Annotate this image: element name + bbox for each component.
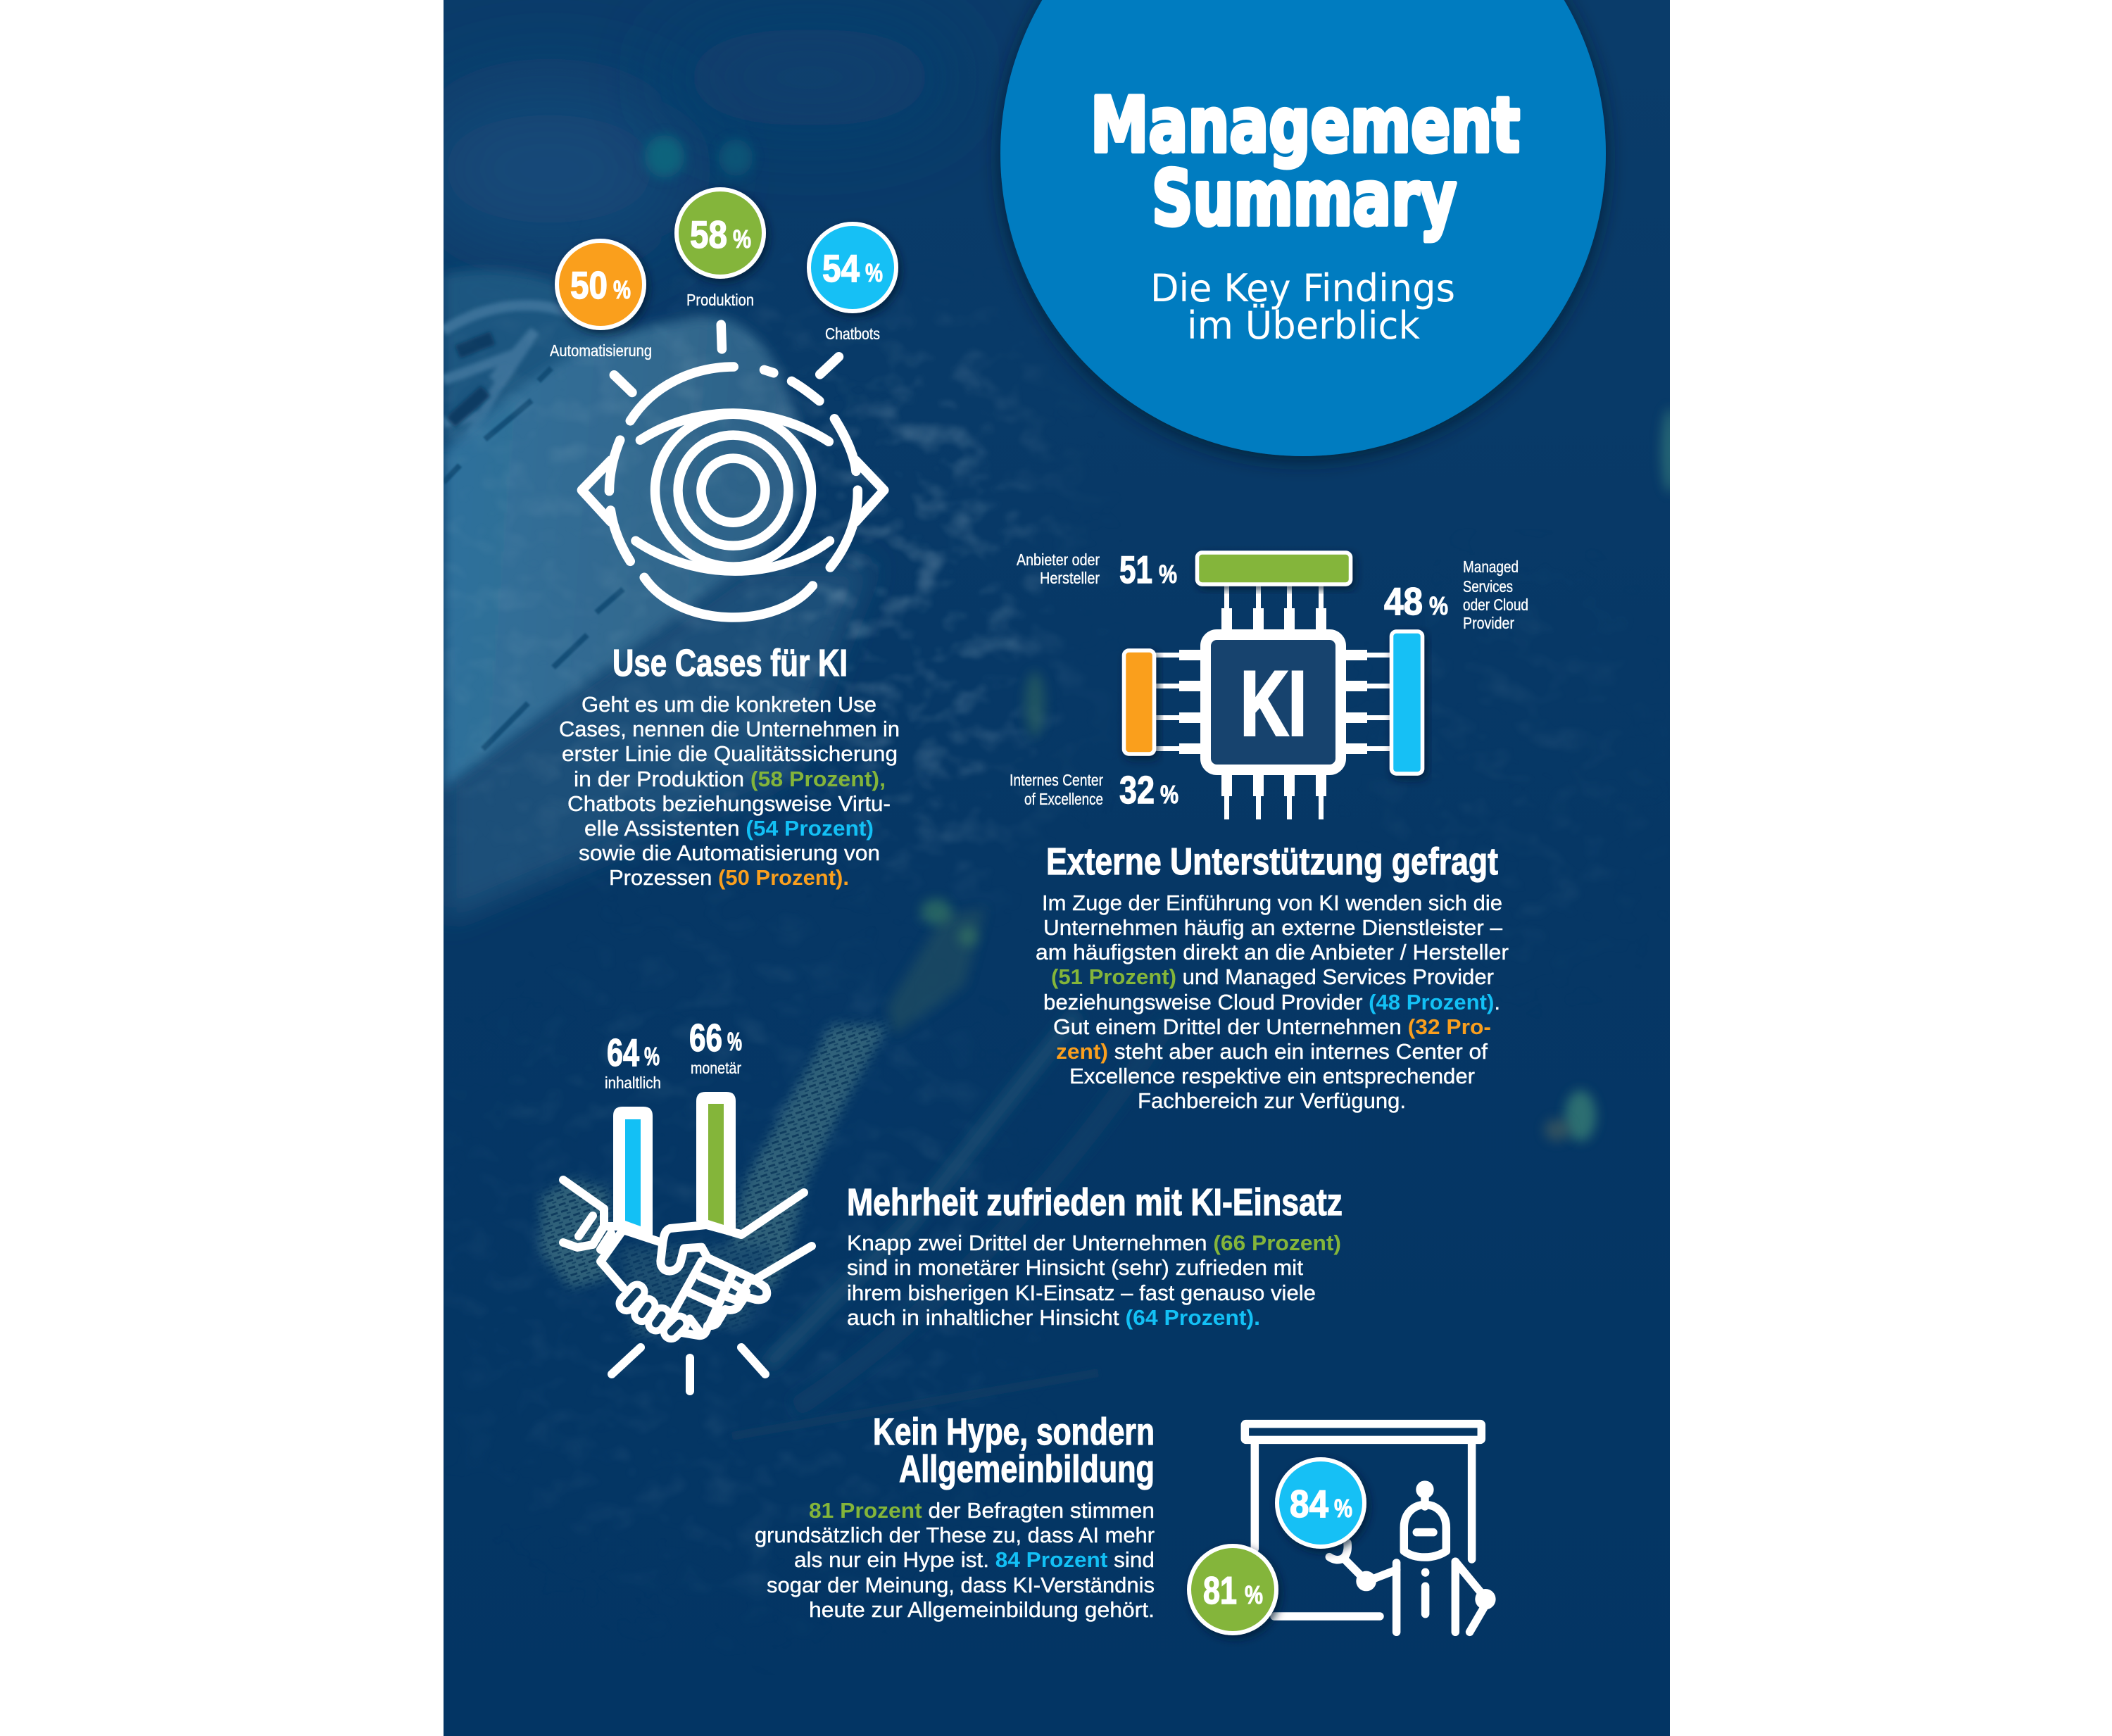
stat: 51 percent: 51 xyxy=(1119,548,1152,591)
text block: Unternehmen häufig an externe Dienstleister – xyxy=(1043,916,1502,940)
bubble: 50 percent Automatisierung: % xyxy=(613,275,631,304)
bubble: 84 percent xyxy=(1277,1459,1364,1547)
stat: 64 percent inhaltlich: 64 xyxy=(607,1031,639,1074)
bubble: 84 percent: 84 xyxy=(1290,1482,1328,1526)
panel: kein hype xyxy=(755,1411,1496,1633)
heading: Allgemeinbildung xyxy=(899,1448,1155,1490)
stat: 66 percent monetaer xyxy=(689,1016,742,1077)
stat: 48 percent: 48 xyxy=(1384,579,1423,623)
text block: Chatbots beziehungsweise Virtu- xyxy=(567,792,891,816)
text block xyxy=(755,1499,1155,1622)
stat: 32 percent: 32 xyxy=(1119,768,1155,812)
panel: externe unterstuetzung xyxy=(1010,548,1528,1113)
bubble: 54 percent Chatbots xyxy=(809,224,896,343)
text block: sind in monetärer Hinsicht (sehr) zufrieden mit xyxy=(847,1256,1304,1280)
stat: 32 percent: Internes Center xyxy=(1010,771,1103,789)
text block xyxy=(559,693,900,890)
stat: 64 percent inhaltlich xyxy=(605,1031,661,1092)
text block: ihrem bisherigen KI-Einsatz – fast genauso viele xyxy=(847,1281,1316,1305)
bubble: 50 percent Automatisierung: Automatisierung xyxy=(550,341,652,360)
text block: 81 Prozent der Befragten stimmen xyxy=(809,1499,1155,1523)
stat: 51 percent xyxy=(1017,548,1177,591)
title circle xyxy=(1000,0,1606,456)
text block: Cases, nennen die Unternehmen in xyxy=(559,717,900,741)
icon: KI chip xyxy=(1124,553,1422,819)
heading: Use Cases für KI xyxy=(612,642,848,684)
bubble: 81 percent: % xyxy=(1245,1580,1263,1609)
heading: Mehrheit zufrieden mit KI-Einsatz xyxy=(847,1181,1343,1224)
text block: sogar der Meinung, dass KI-Verständnis xyxy=(767,1573,1155,1597)
stat: 48 percent: Provider xyxy=(1463,614,1514,632)
stat: 64 percent inhaltlich: % xyxy=(644,1042,660,1071)
icon: eye xyxy=(582,325,884,617)
title: Management xyxy=(1090,82,1520,170)
text block: beziehungsweise Cloud Provider (48 Prozent). xyxy=(1043,990,1500,1014)
stat: 32 percent xyxy=(1010,768,1178,812)
stat: 51 percent: Hersteller xyxy=(1040,569,1100,587)
heading xyxy=(873,1411,1155,1490)
text block: elle Assistenten (54 Prozent) xyxy=(584,817,874,841)
bubble: 81 percent: 81 xyxy=(1203,1568,1237,1612)
icon: handshake with bars xyxy=(563,1092,812,1391)
text block: heute zur Allgemeinbildung gehört. xyxy=(809,1598,1155,1622)
stat: 48 percent: Services xyxy=(1463,577,1513,596)
text block: zent) steht aber auch ein internes Center of xyxy=(1056,1040,1488,1064)
icon: KI chip: KI xyxy=(1240,652,1307,755)
title xyxy=(1090,82,1520,243)
stat: 32 percent: of Excellence xyxy=(1024,790,1103,808)
title: Summary xyxy=(1152,155,1457,243)
stat: 48 percent xyxy=(1384,558,1528,632)
bubble: 54 percent Chatbots: % xyxy=(865,258,883,287)
heading: Externe Unterstützung gefragt xyxy=(1046,841,1498,883)
text block: Prozessen (50 Prozent). xyxy=(609,866,849,890)
text block xyxy=(1036,891,1509,1113)
stat: 66 percent monetaer: 66 xyxy=(689,1016,722,1059)
text block xyxy=(847,1231,1341,1330)
text block: (51 Prozent) und Managed Services Provider xyxy=(1051,965,1494,989)
background panel xyxy=(408,0,1678,1736)
bubble: 58 percent Produktion: 58 xyxy=(690,213,727,256)
text block: Geht es um die konkreten Use xyxy=(582,693,876,717)
heading: Kein Hype, sondern xyxy=(873,1411,1155,1453)
text block: erster Linie die Qualitätssicherung xyxy=(562,742,898,766)
stat: 66 percent monetaer: % xyxy=(727,1027,742,1056)
stat: 32 percent: % xyxy=(1160,780,1178,809)
bubble: 84 percent: % xyxy=(1334,1494,1352,1523)
text block: als nur ein Hype ist. 84 Prozent sind xyxy=(794,1548,1155,1572)
text block: sowie die Automatisierung von xyxy=(579,841,880,865)
stat: 48 percent: Managed xyxy=(1463,558,1519,576)
bubble: 50 percent Automatisierung xyxy=(550,241,652,360)
stat: 66 percent monetaer: monetär xyxy=(691,1059,741,1077)
stat: 48 percent: % xyxy=(1429,591,1448,620)
bubble: 54 percent Chatbots: Chatbots xyxy=(825,325,880,343)
text block: am häufigsten direkt an die Anbieter / Hersteller xyxy=(1036,941,1509,964)
subtitle: Die Key Findings xyxy=(1150,266,1455,310)
text block: in der Produktion (58 Prozent), xyxy=(574,767,886,791)
bubble: 58 percent Produktion: Produktion xyxy=(686,291,754,309)
subtitle: im Überblick xyxy=(1187,303,1421,348)
text block: Fachbereich zur Verfügung. xyxy=(1138,1089,1406,1113)
text block: Excellence respektive ein entsprechender xyxy=(1069,1064,1475,1088)
bubble: 58 percent Produktion: % xyxy=(733,225,751,253)
stat: 51 percent: % xyxy=(1159,560,1177,589)
text block: Im Zuge der Einführung von KI wenden sich die xyxy=(1042,891,1502,915)
panel: mehrheit zufrieden xyxy=(563,1016,1343,1391)
stat: 64 percent inhaltlich: inhaltlich xyxy=(605,1074,661,1092)
text block: auch in inhaltlicher Hinsicht (64 Prozent). xyxy=(847,1306,1260,1330)
bubble: 81 percent xyxy=(1189,1546,1276,1633)
icon: robot presenting at screen xyxy=(1245,1424,1496,1632)
bubble: 50 percent Automatisierung: 50 xyxy=(570,263,608,307)
text block: grundsätzlich der These zu, dass AI mehr xyxy=(755,1523,1155,1547)
stat: 51 percent: Anbieter oder xyxy=(1017,551,1100,569)
stat: 48 percent: oder Cloud xyxy=(1463,596,1528,614)
panel: use cases xyxy=(550,189,900,890)
text block: Gut einem Drittel der Unternehmen (32 Pro- xyxy=(1053,1015,1491,1039)
text block: Knapp zwei Drittel der Unternehmen (66 Prozent) xyxy=(847,1231,1341,1255)
bubble: 58 percent Produktion xyxy=(677,189,764,309)
bubble: 54 percent Chatbots: 54 xyxy=(822,246,860,290)
subtitle xyxy=(1150,266,1455,348)
